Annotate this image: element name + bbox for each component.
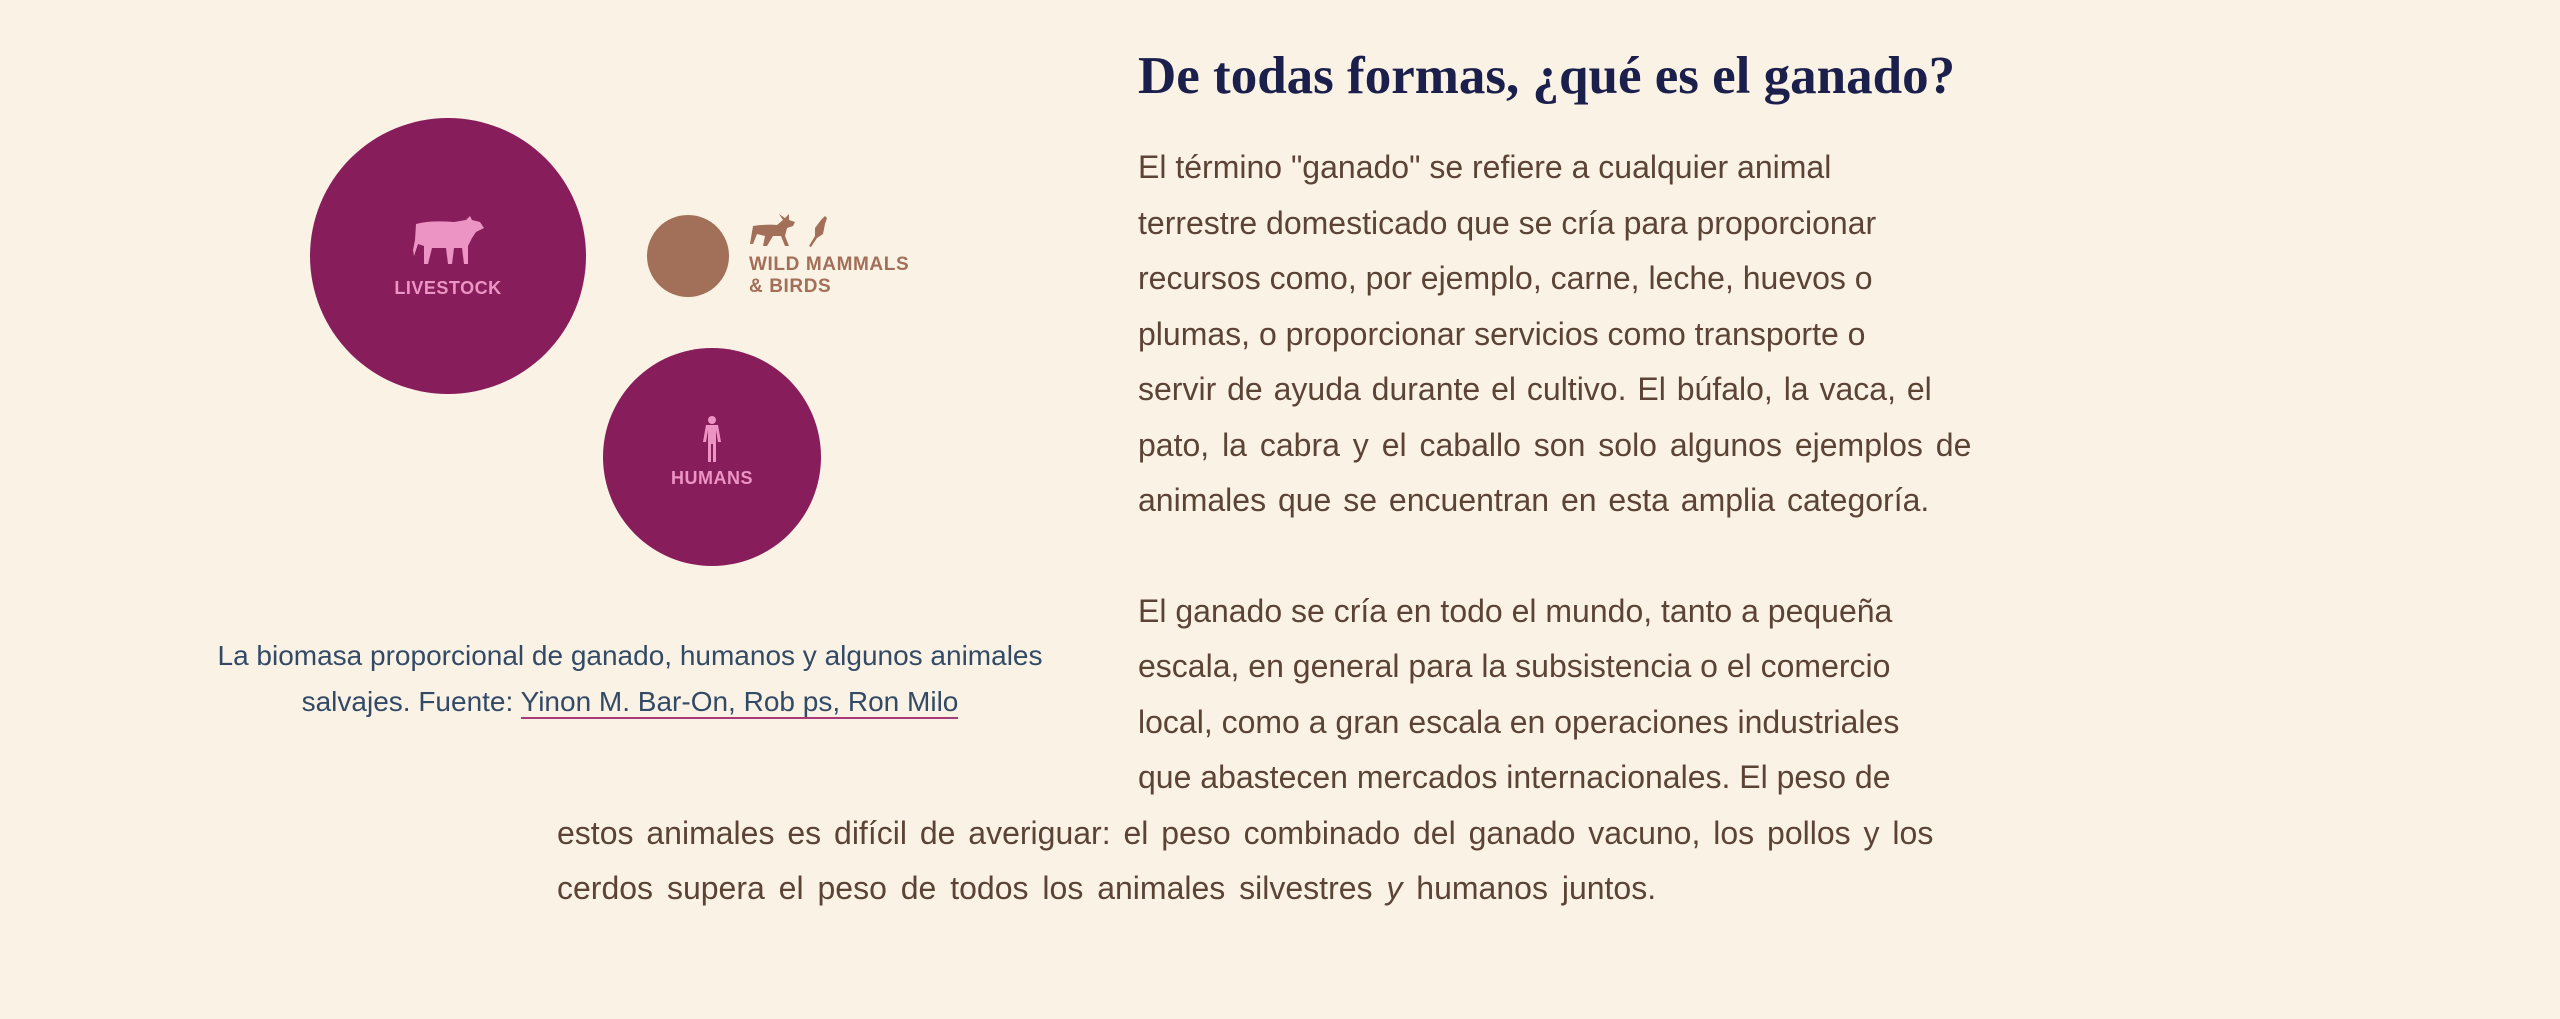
circle: humans [603,348,821,566]
text block: definition paragraph [1138,149,1971,518]
text block: scale paragraph [557,593,1933,906]
text: servir de ayuda durante el cultivo. El búfalo, la vaca, el [1138,371,1932,407]
icon: moose and bird [750,214,827,247]
circle: wild mammals & birds [647,215,729,297]
text: cerdos supera el peso de todos los animales silvestres y humanos juntos. [557,870,1656,906]
icon: human [703,416,721,462]
label: wild mammals & birds [749,254,909,297]
label: livestock: LIVESTOCK [394,278,502,298]
caption: salvajes. Fuente: Yinon M. Bar-On, Rob ps, Ron Milo [302,686,958,717]
text: estos animales es difícil de averiguar: el peso combinado del ganado vacuno, los pollos y los [557,815,1933,851]
label: wild mammals & birds: WILD MAMMALS [749,254,909,275]
icon: cow [413,216,484,264]
text: escala, en general para la subsistencia o el comercio [1138,648,1890,684]
caption [218,640,1042,719]
label: humans: HUMANS [671,468,753,488]
circle: livestock [310,118,586,394]
text: plumas, o proporcionar servicios como transporte o [1138,316,1865,352]
title: De todas formas, ¿qué es el ganado? [1138,47,1955,105]
caption: La biomasa proporcional de ganado, humanos y algunos animales [218,640,1042,671]
bubble chart [310,118,909,566]
text: El ganado se cría en todo el mundo, tanto a pequeña [1138,593,1892,629]
text: animales que se encuentran en esta amplia categoría. [1138,482,1929,518]
text: El término "ganado" se refiere a cualquier animal [1138,149,1831,185]
label: wild mammals & birds: & BIRDS [749,276,831,297]
text: local, como a gran escala en operaciones industriales [1138,704,1899,740]
text: que abastecen mercados internacionales. El peso de [1138,759,1890,795]
text: recursos como, por ejemplo, carne, leche, huevos o [1138,260,1873,296]
text: pato, la cabra y el caballo son solo algunos ejemplos de [1138,427,1971,463]
text: terrestre domesticado que se cría para proporcionar [1138,205,1876,241]
